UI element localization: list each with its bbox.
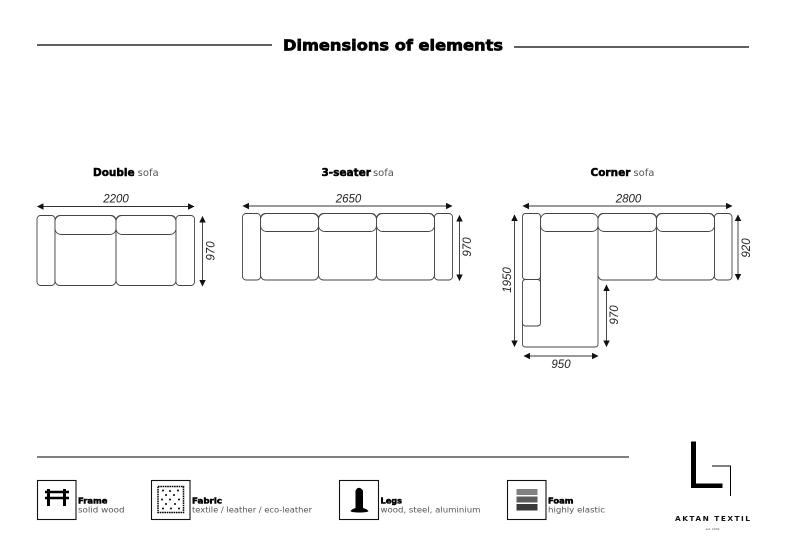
dimension: depth 920: 920 <box>741 238 753 258</box>
logo: Aktan Textil: est. 2002 <box>705 527 720 531</box>
title: Dimensions of elements <box>283 36 503 54</box>
logo: Aktan Textil: AKTAN TEXTIL <box>675 514 750 523</box>
heading: double sofa: Double sofa <box>93 167 159 179</box>
icon: foam <box>508 480 546 520</box>
dimension: depth 970 <box>202 216 218 286</box>
dimension: chaise width 950 <box>524 356 598 371</box>
dimension: length 1950 <box>502 215 514 346</box>
text: foam detail: highly elastic <box>548 504 605 514</box>
text: solid wood: solid wood <box>78 504 124 514</box>
label: foam: Foam <box>548 496 574 506</box>
dimension: depth 920 <box>738 215 753 280</box>
panel: frame <box>38 480 124 520</box>
dimension: chaise 970: 970 <box>609 305 621 325</box>
panel: foam <box>508 480 605 520</box>
icon: frame <box>38 480 76 520</box>
materials divider <box>37 456 629 458</box>
sofa plan: double <box>37 216 194 286</box>
icon: leg <box>340 480 378 520</box>
label: legs: Legs <box>380 496 402 506</box>
panel: 3-seater sofa <box>242 167 474 280</box>
logo: Aktan Textil <box>675 442 750 531</box>
dimension: depth 970 <box>460 216 474 280</box>
text: leg materials: wood, steel, aluminium <box>380 504 481 514</box>
sofa plan: 3-seater <box>242 214 452 280</box>
heading: 3-seater sofa: 3-seatersofa <box>322 167 394 179</box>
icon: fabric <box>152 480 190 520</box>
dimension: length 1950: 1950 <box>502 267 514 293</box>
panel: legs <box>340 480 481 520</box>
dimension: width 2800: 2800 <box>615 194 642 206</box>
dimension: depth 970: 970 <box>462 237 474 257</box>
dimension: width 2200: 2200 <box>102 194 129 206</box>
label: fabric: Fabric <box>192 496 222 506</box>
dimension: depth 970: 970 <box>206 241 218 261</box>
text: fabric options: textile / leather / eco-leather <box>192 504 313 514</box>
panel: fabric <box>152 480 313 520</box>
panel: double sofa <box>37 167 218 286</box>
dimension: width 2650: 2650 <box>335 194 362 206</box>
label: frame: Frame <box>78 496 108 506</box>
dimension: chaise 970 <box>606 285 621 346</box>
heading: corner sofa: Corner sofa <box>590 167 654 179</box>
sofa plan: corner <box>522 214 732 347</box>
dimension: chaise width 950: 950 <box>551 359 571 371</box>
panel: corner sofa <box>502 167 753 371</box>
